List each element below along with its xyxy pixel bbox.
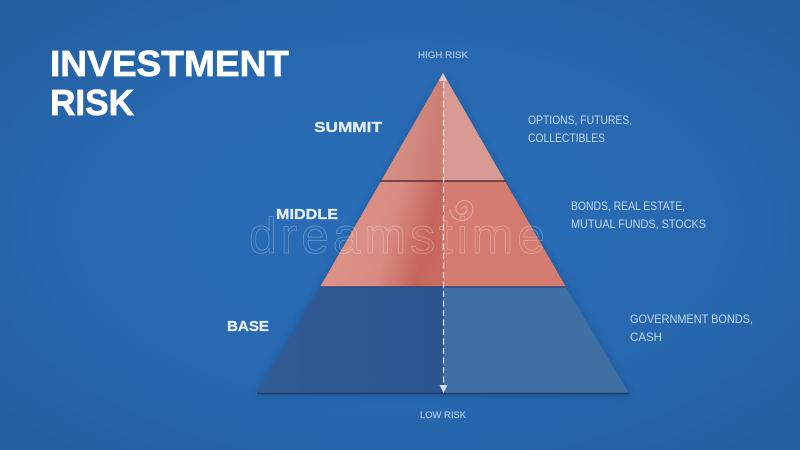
text: summit assets [528,113,632,145]
watermark: dreamstime [249,208,545,264]
text: base assets: CASH [630,330,662,344]
tier: middle [320,181,566,287]
title [50,43,289,123]
text: middle assets: BONDS, REAL ESTATE, [571,199,685,213]
low risk label: LOW RISK [420,410,467,421]
text: middle assets [571,199,706,231]
risk arrow [440,82,448,393]
label: middle: MIDDLE [276,206,338,223]
title: INVESTMENT [50,43,289,84]
high risk label: HIGH RISK [418,50,469,61]
tier: summit [381,73,505,181]
label: summit: SUMMIT [314,119,382,136]
text: base assets [630,312,753,344]
pyramid [256,73,630,396]
text: summit assets: OPTIONS, FUTURES, [528,113,632,127]
tier divider lines [257,181,629,394]
text: base assets: GOVERNMENT BONDS, [630,312,753,326]
pyramid shadow [256,76,630,396]
label: base: BASE [227,318,269,335]
tier: base [257,287,629,393]
text: middle assets: MUTUAL FUNDS, STOCKS [571,217,706,231]
title: RISK [50,82,134,123]
text: summit assets: COLLECTIBLES [528,131,605,145]
